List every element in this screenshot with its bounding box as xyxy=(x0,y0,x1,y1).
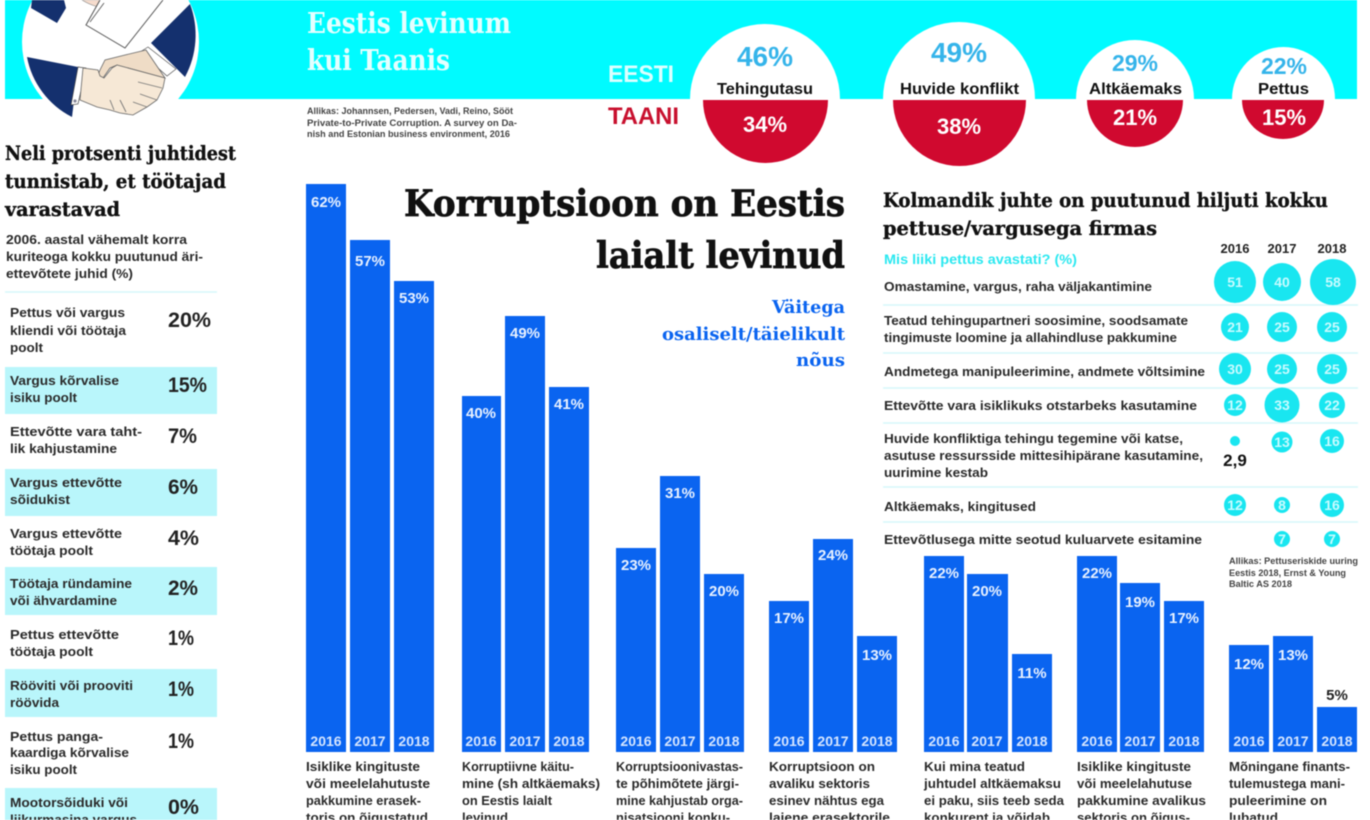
bar chart: agreement by statement 2016-2018 xyxy=(306,184,1357,820)
row: Teatud tehingupartneri soosimine: 25 xyxy=(1274,319,1290,335)
bar group 1: või meelelahutuste xyxy=(306,776,430,791)
bar group 1: Isiklike kingituste xyxy=(306,759,420,774)
bar group 4: esinev nähtus ega xyxy=(769,793,885,808)
bar group 4: 2018 xyxy=(861,733,893,749)
bar group 2: 49% xyxy=(510,325,540,342)
bar group 7: 5% xyxy=(1326,687,1348,704)
row: Ettevõtte vara isiklikuks otstarbeks: 22 xyxy=(1324,397,1340,413)
comparison bubble: Tehingutasu xyxy=(690,24,840,163)
bar group 2: 41% xyxy=(554,396,584,413)
bar group 5: 2018 xyxy=(1016,733,1048,749)
left panel heading xyxy=(4,141,237,221)
bar group 3: 23% xyxy=(621,557,651,574)
row: Pettus ettevõtte töötaja poolt: Pettus ettevõtte xyxy=(10,627,119,642)
chart subtitle: osaliselt/täielikult xyxy=(662,324,846,345)
bar group 7 xyxy=(1229,636,1357,820)
comparison bubble: Pettus xyxy=(1232,47,1335,139)
row: Pettus pangakaardiga kõrvalise isiku poolt: 1% xyxy=(168,730,194,753)
banner title: kui Taanis xyxy=(307,43,450,77)
row: Töötaja ründamine või ähvardamine: või ähvardamine xyxy=(10,593,117,608)
bar group 2: 2016 xyxy=(465,733,497,749)
bar group 1: 2018 xyxy=(398,733,430,749)
row: Vargus kõrvalise isiku poolt: Vargus kõrvalise xyxy=(10,373,119,388)
row: Töötaja ründamine või ähvardamine xyxy=(5,567,217,615)
bar group 7: 13% xyxy=(1278,647,1308,664)
comparison bubble: Huvide konflikt: 38% xyxy=(937,114,981,139)
row: Mootorsõiduki või liikurmasina vargus: 0% xyxy=(168,796,199,819)
left panel subtitle: 2006. aastal vähemalt korra xyxy=(6,232,188,247)
row: Huvide konfliktiga tehing: 16 xyxy=(1324,433,1340,449)
row: Omastamine: 58 xyxy=(1325,274,1341,290)
comparison bubble: Pettus: 22% xyxy=(1261,53,1307,79)
bar group 4: 24% xyxy=(818,547,848,564)
right panel heading: pettuse/vargusega firmas xyxy=(883,216,1157,240)
row: Vargus kõrvalise isiku poolt: 15% xyxy=(168,374,207,397)
bar group 5: 2016 xyxy=(928,733,960,749)
comparison bubble: Altkäemaks: Altkäemaks xyxy=(1089,81,1182,98)
row: Rööviti või prooviti röövida: röövida xyxy=(10,695,60,710)
row: Andmetega manipuleerimine: 25 xyxy=(1324,361,1340,377)
row: Andmetega manipuleerimine xyxy=(884,353,1347,385)
bar group 3: mine kahjustab orga- xyxy=(616,793,743,808)
bar group 5: 20% xyxy=(972,583,1002,600)
source note: corruption survey: Allikas: Johannsen, Pedersen, Vadi, Reino, Sööt xyxy=(307,106,513,116)
comparison bubble: Tehingutasu: 34% xyxy=(743,112,787,137)
left panel subtitle xyxy=(6,232,203,281)
source note: corruption survey: Private-to-Private Corruption. A survey on Da- xyxy=(307,118,517,128)
row: Huvide konfliktiga tehing: uurimine kestab xyxy=(884,465,988,480)
top cyan banner xyxy=(5,0,1357,99)
bar group 7: 2017 xyxy=(1277,733,1309,749)
row: Vargus ettevõtte sõidukist xyxy=(5,469,217,516)
bar group 6: 2018 xyxy=(1168,733,1200,749)
comparison bubble: Huvide konflikt xyxy=(883,22,1035,166)
row: Huvide konfliktiga tehing: asutuse ressursside mittesihipärane kasutamine, xyxy=(884,448,1203,463)
source note: Ernst and Young: Eestis 2018, Ernst & Young xyxy=(1229,568,1346,578)
bar group 7: Mõningane finants- xyxy=(1229,759,1350,774)
row: Huvide konfliktiga tehing xyxy=(884,429,1344,480)
bar group 1: 53% xyxy=(399,290,429,307)
row: Teatud tehingupartneri soosimine: 21 xyxy=(1227,319,1243,335)
right panel: fraud types bubble table xyxy=(883,188,1358,589)
year headers: 2018 xyxy=(1318,241,1346,256)
row: Teatud tehingupartneri soosimine xyxy=(884,312,1347,345)
row: Vargus kõrvalise isiku poolt xyxy=(5,367,217,414)
bar group 7: 2018 xyxy=(1321,733,1353,749)
row: Vargus ettevõtte töötaja poolt: Vargus ettevõtte xyxy=(10,526,122,541)
row: Vargus kõrvalise isiku poolt: isiku poolt xyxy=(10,390,78,405)
row: Pettus pangakaardiga kõrvalise isiku poolt: isiku poolt xyxy=(10,762,78,777)
row: Ettevõtte vara tahtlik kahjustamine xyxy=(10,424,197,456)
left panel subtitle: ettevõtete juhid (%) xyxy=(6,266,133,281)
row: Ettevõtte vara isiklikuks otstarbeks xyxy=(884,388,1345,422)
row: Andmetega manipuleerimine: Andmetega manipuleerimine, andmete võltsimine xyxy=(884,364,1205,379)
row: Kuluarvete esitamine: 7 xyxy=(1328,531,1336,547)
bar group 6: 2017 xyxy=(1124,733,1156,749)
bar group 7: tulemustega mani- xyxy=(1229,776,1345,791)
row: Pettus või vargus kliendi või töötaja poolt: Pettus või vargus xyxy=(10,305,125,320)
bar group 4: 13% xyxy=(862,647,892,664)
bar group 3: 2017 xyxy=(664,733,696,749)
row: Omastamine: 51 xyxy=(1227,274,1243,290)
icon: handshake illustration xyxy=(22,0,199,130)
year headers: 2017 xyxy=(1268,241,1296,256)
row: Kuluarvete esitamine xyxy=(884,531,1340,547)
bar group 5: ei paku, siis teeb seda xyxy=(924,793,1065,808)
chart subtitle: nõus xyxy=(796,350,845,371)
row: Töötaja ründamine või ähvardamine: 2% xyxy=(168,577,198,600)
bar group 2: on Eestis laialt xyxy=(462,793,553,808)
table question: Mis liiki pettus avastati? (%) xyxy=(884,251,1077,267)
right panel heading: Kolmandik juhte on puutunud hiljuti kokku xyxy=(883,188,1328,212)
left panel heading: Neli protsenti juhtidest xyxy=(5,141,237,165)
row: Vargus ettevõtte töötaja poolt: 4% xyxy=(168,527,199,550)
bar group 6: 19% xyxy=(1125,594,1155,611)
row: Vargus ettevõtte sõidukist: sõidukist xyxy=(10,492,71,507)
chart subtitle: Väitega xyxy=(771,297,845,318)
bar group 5: juhtudel altkäemaksu xyxy=(923,776,1061,791)
legend: Eesti and Taani xyxy=(608,61,679,130)
bar group 7: 2016 xyxy=(1233,733,1265,749)
bar group 2: 2018 xyxy=(553,733,585,749)
bar group 7: 12% xyxy=(1234,656,1264,673)
comparison bubble: Pettus: Pettus xyxy=(1258,81,1309,98)
bar group 3: Korruptsioonivastas- xyxy=(616,759,743,774)
row: Pettus pangakaardiga kõrvalise isiku poolt xyxy=(10,729,194,777)
comparison bubble: Huvide konflikt: 49% xyxy=(931,37,987,68)
legend: Eesti and Taani: EESTI xyxy=(608,61,674,88)
row: Teatud tehingupartneri soosimine: tingimuste loomine ja allahindluse pakkumine xyxy=(884,330,1177,345)
row: Huvide konfliktiga tehing: 13 xyxy=(1274,434,1290,450)
row: Rööviti või prooviti röövida: 1% xyxy=(168,678,194,701)
bar group 1: 57% xyxy=(355,253,385,270)
row: Altkäemaks, kingitused: 16 xyxy=(1324,497,1340,513)
bar group 6: 22% xyxy=(1082,565,1112,582)
bar group 6: 17% xyxy=(1169,610,1199,627)
bar group 1: 2016 xyxy=(310,733,342,749)
row: Vargus ettevõtte töötaja poolt xyxy=(10,526,199,558)
banner title xyxy=(307,6,511,77)
row: Rööviti või prooviti röövida xyxy=(5,669,217,717)
row: Pettus pangakaardiga kõrvalise isiku poolt: kaardiga kõrvalise xyxy=(10,745,129,760)
comparison bubble: Altkäemaks: 21% xyxy=(1113,105,1157,130)
row: Kuluarvete esitamine: 7 xyxy=(1278,531,1286,547)
bar group 4: 2017 xyxy=(817,733,849,749)
bar group 6: või meelelahutuse xyxy=(1077,776,1192,791)
row: Vargus ettevõtte töötaja poolt: töötaja poolt xyxy=(10,543,94,558)
row: Ettevõtte vara tahtlik kahjustamine: 7% xyxy=(168,425,197,448)
row: Pettus või vargus kliendi või töötaja poolt xyxy=(10,305,211,355)
row: Rööviti või prooviti röövida: Rööviti või prooviti xyxy=(10,678,133,693)
bar group 4 xyxy=(769,539,897,820)
bar group 2 xyxy=(462,316,600,820)
bar group 5: 2017 xyxy=(971,733,1003,749)
main heading xyxy=(404,183,845,277)
row: Ettevõtte vara tahtlik kahjustamine: lik kahjustamine xyxy=(10,441,117,456)
left panel subtitle: kuriteoga kokku puutunud äri- xyxy=(6,249,203,264)
source note: corruption survey: nish and Estonian business environment, 2016 xyxy=(307,129,510,139)
bar group 4: avaliku sektoris xyxy=(769,776,870,791)
row: Andmetega manipuleerimine: 30 xyxy=(1227,361,1243,377)
comparison bubble: Altkäemaks xyxy=(1076,40,1194,147)
comparison bubble: Tehingutasu: Tehingutasu xyxy=(717,81,813,98)
bar group 5 xyxy=(923,556,1065,820)
row: Töötaja ründamine või ähvardamine: Töötaja ründamine xyxy=(10,576,132,591)
source note: corruption survey xyxy=(307,106,517,139)
row: Omastamine: 40 xyxy=(1274,274,1290,290)
bar group 3: 2016 xyxy=(620,733,652,749)
year headers: 2016 xyxy=(1221,241,1249,256)
row: Vargus ettevõtte sõidukist: Vargus ettevõtte xyxy=(10,475,122,490)
left panel: crimes encountered by managers xyxy=(4,141,237,820)
chart subtitle xyxy=(662,297,846,371)
row: Kuluarvete esitamine: Ettevõtlusega mitte seotud kuluarvete esitamine xyxy=(884,532,1202,547)
right panel heading xyxy=(883,188,1328,240)
bar group 1: 2017 xyxy=(354,733,386,749)
comparison bubble: Pettus: 15% xyxy=(1262,105,1306,130)
row: Ettevõtte vara tahtlik kahjustamine: Ettevõtte vara taht- xyxy=(10,424,142,439)
row: Altkäemaks, kingitused xyxy=(884,493,1344,517)
comparison bubble: Tehingutasu: 46% xyxy=(737,41,793,72)
row: Pettus ettevõtte töötaja poolt xyxy=(10,627,194,659)
row: Pettus või vargus kliendi või töötaja poolt: 20% xyxy=(168,309,211,332)
main heading: Korruptsioon on Eestis xyxy=(404,183,845,225)
bar group 1 xyxy=(306,184,434,820)
bar group 3: te põhimõtete järgi- xyxy=(616,776,739,791)
row: Mootorsõiduki või liikurmasina vargus xyxy=(5,788,217,820)
bar group 1: pakkumine erasek- xyxy=(306,793,421,808)
bar group 6: Isiklike kingituste xyxy=(1077,759,1191,774)
row: Pettus pangakaardiga kõrvalise isiku poolt: Pettus panga- xyxy=(10,729,103,744)
row: Pettus ettevõtte töötaja poolt: 1% xyxy=(168,627,194,650)
row: Pettus või vargus kliendi või töötaja poolt: poolt xyxy=(10,340,44,355)
bar group 2: 40% xyxy=(466,405,496,422)
row: Pettus ettevõtte töötaja poolt: töötaja poolt xyxy=(10,644,94,659)
main heading: laialt levinud xyxy=(596,235,845,277)
bar group 4: 2016 xyxy=(773,733,805,749)
year headers xyxy=(1221,241,1346,256)
source note: Ernst and Young: Allikas: Pettuseriskide uuring xyxy=(1229,556,1358,566)
comparison bubble: Huvide konflikt: Huvide konflikt xyxy=(900,81,1020,98)
row: Omastamine xyxy=(884,259,1356,305)
bar group 5: 11% xyxy=(1017,665,1047,682)
row: Huvide konfliktiga tehing: Huvide konfliktiga tehingu tegemine või katse, xyxy=(884,431,1183,446)
row: Pettus või vargus kliendi või töötaja poolt: kliendi või töötaja xyxy=(10,323,127,338)
bar group 2: Korruptiivne käitu- xyxy=(462,759,574,774)
row: Altkäemaks, kingitused: Altkäemaks, kingitused xyxy=(884,499,1036,514)
bar group 6: pakkumine avalikus xyxy=(1077,793,1206,808)
comparison bubble: Altkäemaks: 29% xyxy=(1112,50,1158,76)
bar group 2: 2017 xyxy=(509,733,541,749)
row: Huvide konfliktiga tehing: 2,9 xyxy=(1223,451,1247,470)
left panel heading: varastavad xyxy=(4,197,120,221)
row: Ettevõtte vara isiklikuks otstarbeks: 12 xyxy=(1227,397,1243,413)
source note: Ernst and Young xyxy=(1229,556,1358,589)
row: Ettevõtte vara isiklikuks otstarbeks: Ettevõtte vara isiklikuks otstarbeks kasutamine xyxy=(884,398,1197,413)
bar group 4: Korruptsioon on xyxy=(769,759,875,774)
bar group 2: mine (sh altkäemaks) xyxy=(462,776,600,791)
row: Mootorsõiduki või liikurmasina vargus: Mootorsõiduki või xyxy=(10,795,128,810)
row: Altkäemaks, kingitused: 8 xyxy=(1278,497,1286,513)
bar group 5: Kui mina teatud xyxy=(924,759,1025,774)
row: Omastamine: Omastamine, vargus, raha väljakantimine xyxy=(884,279,1152,294)
bar group 4: 17% xyxy=(774,610,804,627)
row: Teatud tehingupartneri soosimine: 25 xyxy=(1324,319,1340,335)
row: Ettevõtte vara isiklikuks otstarbeks: 33 xyxy=(1274,397,1290,413)
row: Andmetega manipuleerimine: 25 xyxy=(1274,361,1290,377)
bar group 5: 22% xyxy=(929,565,959,582)
bar group 1: 62% xyxy=(311,194,341,211)
bar group 3: 31% xyxy=(665,485,695,502)
bar group 3 xyxy=(616,476,744,820)
bar group 7: puleerimine on xyxy=(1229,793,1327,808)
row: Altkäemaks, kingitused: 12 xyxy=(1227,497,1243,513)
bar group 6: 2016 xyxy=(1081,733,1113,749)
left panel heading: tunnistab, et töötajad xyxy=(5,169,226,193)
source note: Ernst and Young: Baltic AS 2018 xyxy=(1229,579,1292,589)
row: Teatud tehingupartneri soosimine: Teatud tehingupartneri soosimine, soodsamate xyxy=(884,313,1188,328)
legend: Eesti and Taani: TAANI xyxy=(608,103,679,130)
banner title: Eestis levinum xyxy=(307,6,511,40)
bar group 3: 20% xyxy=(709,583,739,600)
row: Vargus ettevõtte sõidukist: 6% xyxy=(168,476,198,499)
bar group 6 xyxy=(1077,556,1206,820)
bar group 3: 2018 xyxy=(708,733,740,749)
